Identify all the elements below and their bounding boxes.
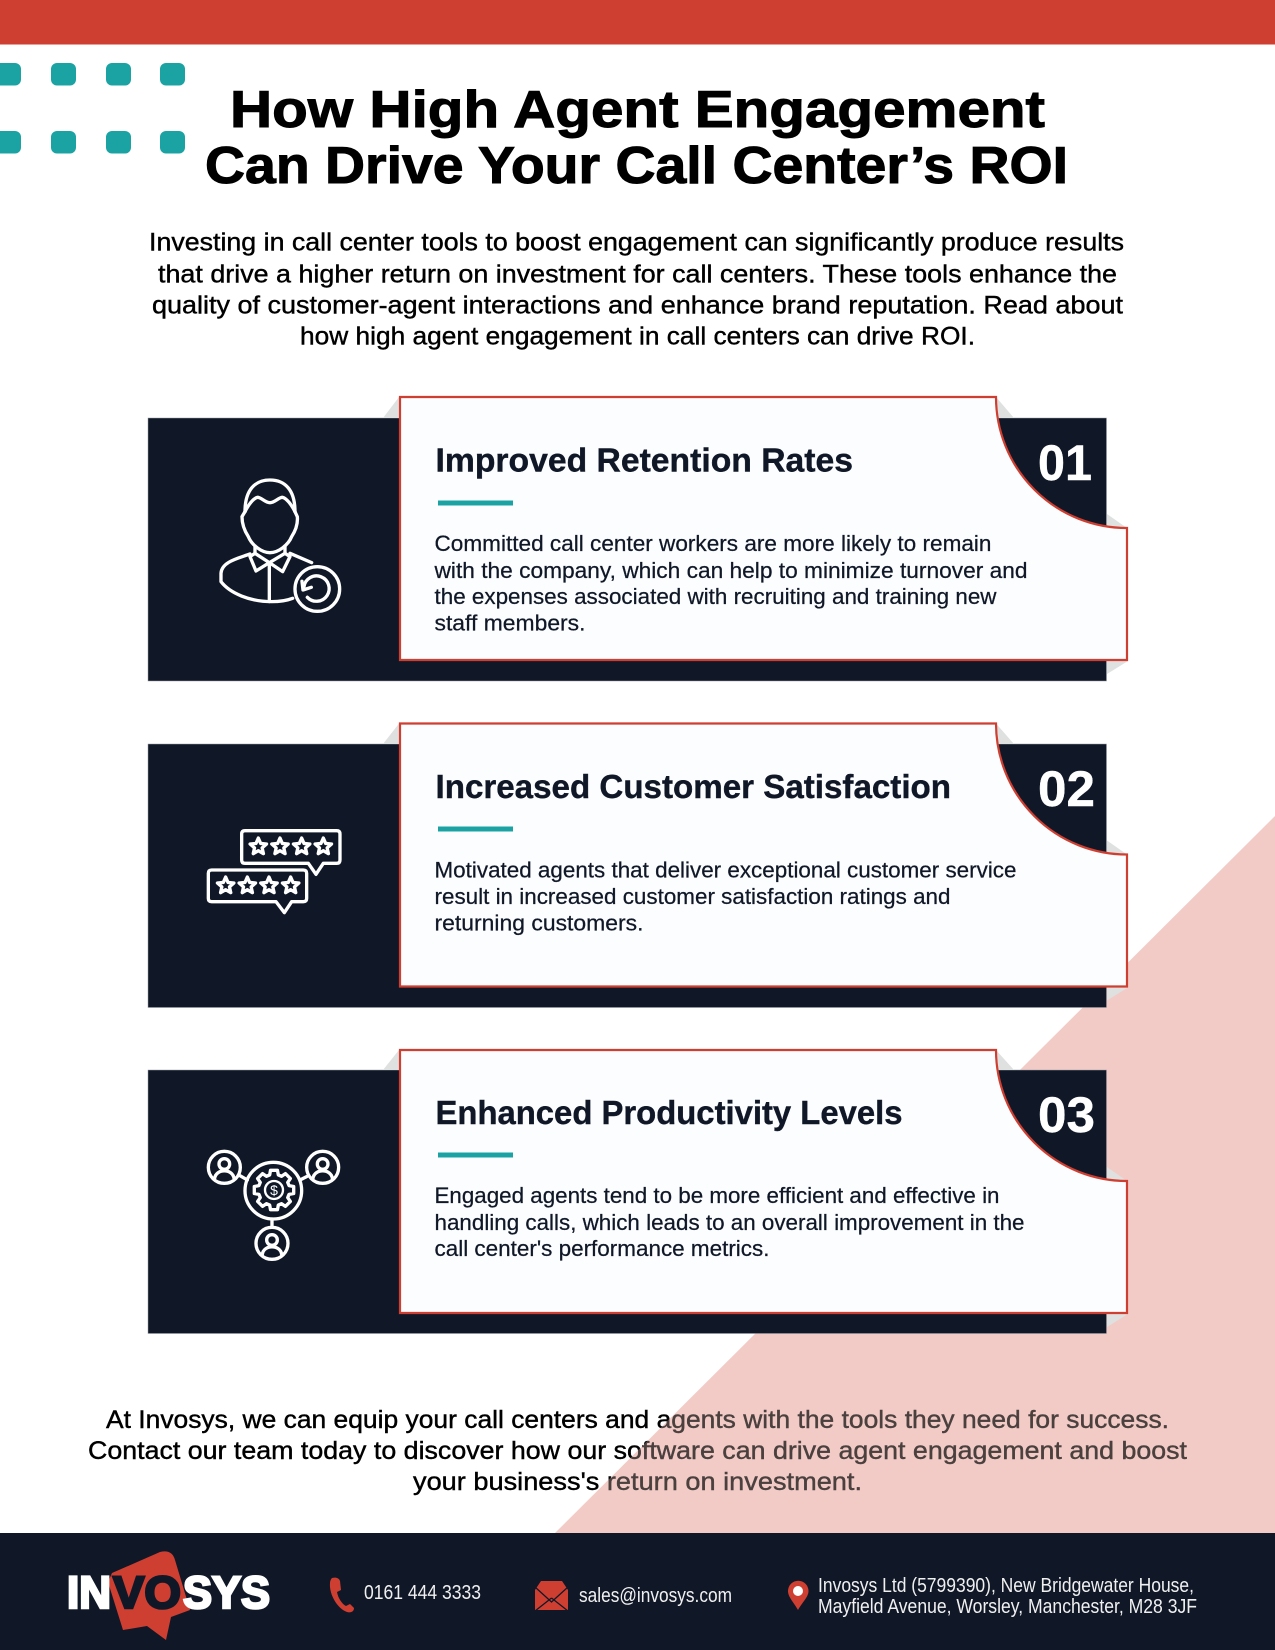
panel: 02 increased customer satisfaction bbox=[148, 724, 1128, 1008]
icon: phone bbox=[330, 1578, 354, 1612]
logo: Invosys: IN bbox=[67, 1567, 111, 1618]
teal rule bbox=[438, 500, 513, 506]
icon: star rating speech bubbles bbox=[208, 831, 340, 913]
body text bbox=[433, 531, 1027, 636]
closing paragraph bbox=[88, 1406, 1187, 1496]
heading: Enhanced Productivity Levels bbox=[436, 1094, 902, 1131]
teal rule bbox=[438, 1152, 513, 1158]
body text: Engaged agents tend to be more efficient and effective in bbox=[434, 1183, 1000, 1208]
paper fold shadows bbox=[383, 1050, 1128, 1327]
title bbox=[205, 81, 1068, 195]
logo: Invosys: VO bbox=[113, 1567, 181, 1618]
logo: Invosys: SYS bbox=[183, 1567, 270, 1618]
body text: call center's performance metrics. bbox=[434, 1236, 770, 1261]
intro paragraph: how high agent engagement in call centers can drive ROI. bbox=[300, 322, 975, 350]
white card with curved corner bbox=[400, 397, 1127, 660]
card dark backing bbox=[148, 418, 1106, 681]
number 03: 03 bbox=[1038, 1087, 1095, 1143]
logo: Invosys bbox=[67, 1551, 270, 1640]
body text: Committed call center workers are more likely to remain bbox=[434, 531, 992, 556]
icon: agents around a money gear bbox=[208, 1151, 339, 1259]
white card with curved corner bbox=[400, 724, 1127, 986]
panel: 01 improved retention rates bbox=[148, 397, 1128, 681]
number 01: 01 bbox=[1038, 435, 1092, 491]
heading: Improved Retention Rates bbox=[436, 442, 853, 478]
title: Can Drive Your Call Center’s ROI bbox=[205, 137, 1068, 195]
icon: envelope bbox=[535, 1581, 568, 1611]
paper fold shadows bbox=[383, 397, 1128, 674]
body text: with the company, which can help to minimize turnover and bbox=[433, 558, 1027, 583]
closing paragraph: Contact our team today to discover how our software can drive agent engagement and boost bbox=[88, 1437, 1187, 1465]
icon: map pin bbox=[788, 1581, 808, 1610]
intro paragraph: quality of customer-agent interactions and enhance brand reputation. Read about bbox=[152, 292, 1123, 320]
title: How High Agent Engagement bbox=[230, 81, 1045, 139]
postal address: Invosys Ltd (5799390), New Bridgewater House, bbox=[818, 1575, 1194, 1597]
panel: 03 enhanced productivity levels bbox=[148, 1050, 1128, 1334]
body text: result in increased customer satisfaction ratings and bbox=[434, 884, 950, 909]
card dark backing bbox=[148, 744, 1106, 1008]
body text: Motivated agents that deliver exceptional customer service bbox=[434, 858, 1016, 882]
closing paragraph: your business's return on investment. bbox=[413, 1468, 862, 1496]
closing paragraph: At Invosys, we can equip your call centers and agents with the tools they need for success. bbox=[106, 1406, 1169, 1434]
card dark backing bbox=[148, 1070, 1106, 1334]
top red bar bbox=[0, 0, 1275, 44]
intro paragraph: that drive a higher return on investment for call centers. These tools enhance the bbox=[158, 260, 1117, 288]
postal address bbox=[818, 1575, 1197, 1618]
intro paragraph bbox=[149, 228, 1124, 350]
pink background triangle bbox=[555, 816, 1275, 1533]
body text: returning customers. bbox=[434, 910, 644, 936]
email address: sales@invosys.com bbox=[579, 1585, 732, 1607]
icon: agents around a money gear: $ bbox=[270, 1182, 278, 1198]
phone number: 0161 444 3333 bbox=[364, 1582, 481, 1604]
body text: handling calls, which leads to an overall improvement in the bbox=[434, 1210, 1024, 1235]
teal dots decoration bbox=[0, 63, 185, 154]
body text: the expenses associated with recruiting and training new bbox=[434, 584, 997, 609]
intro paragraph: Investing in call center tools to boost engagement can significantly produce results bbox=[149, 228, 1124, 256]
icon: agent with retention arrow bbox=[221, 480, 340, 611]
logo speech bubble bbox=[108, 1551, 190, 1640]
paper fold shadows bbox=[383, 724, 1128, 1000]
body text bbox=[434, 858, 1016, 936]
body text bbox=[434, 1183, 1024, 1261]
footer bar bbox=[0, 1533, 1275, 1650]
number 02: 02 bbox=[1038, 761, 1095, 817]
heading: Increased Customer Satisfaction bbox=[436, 768, 951, 805]
body text: staff members. bbox=[434, 610, 586, 636]
white card with curved corner bbox=[400, 1050, 1127, 1313]
teal rule bbox=[438, 826, 513, 832]
postal address: Mayfield Avenue, Worsley, Manchester, M28 3JF bbox=[818, 1596, 1197, 1618]
